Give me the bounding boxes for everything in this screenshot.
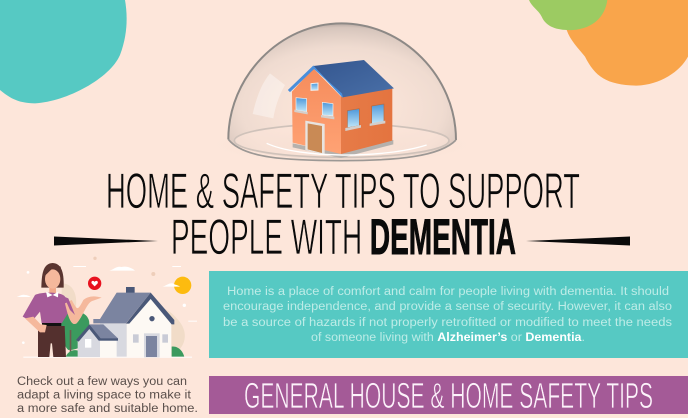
woman (23, 263, 102, 357)
panel: intro paragraph: of someone living with Alzheimer’s or Dementia . (311, 332, 585, 344)
right wedge divider (526, 236, 630, 246)
icon: heart badge (88, 277, 101, 290)
title line 2: PEOPLE WITH DEMENTIA (171, 209, 516, 265)
title (106, 163, 580, 265)
panel: intro paragraph (209, 271, 688, 358)
intro text: check out a few ways: a more safe and suitable home. (17, 403, 198, 415)
house (76, 287, 174, 357)
orange and green background blobs (529, 0, 688, 86)
icon: house under glass dome (202, 23, 482, 166)
illustration: woman and house (17, 257, 197, 358)
intro text: check out a few ways: adapt a living space to make it (17, 390, 192, 402)
intro text: check out a few ways (17, 376, 198, 415)
teal background blob (0, 0, 127, 103)
panel: intro paragraph: encourage independence, and provide a sense of security. However, it can also (223, 301, 672, 313)
sun and clouds (17, 257, 197, 344)
left wedge divider (54, 236, 158, 246)
intro text: check out a few ways: Check out a few ways you can (17, 376, 187, 388)
panel: intro paragraph: Home is a place of comfort and calm for people living with dementia. It should (227, 286, 669, 298)
panel: intro paragraph: be a source of hazards if not properly retrofitted or modified to meet the needs (223, 317, 672, 329)
